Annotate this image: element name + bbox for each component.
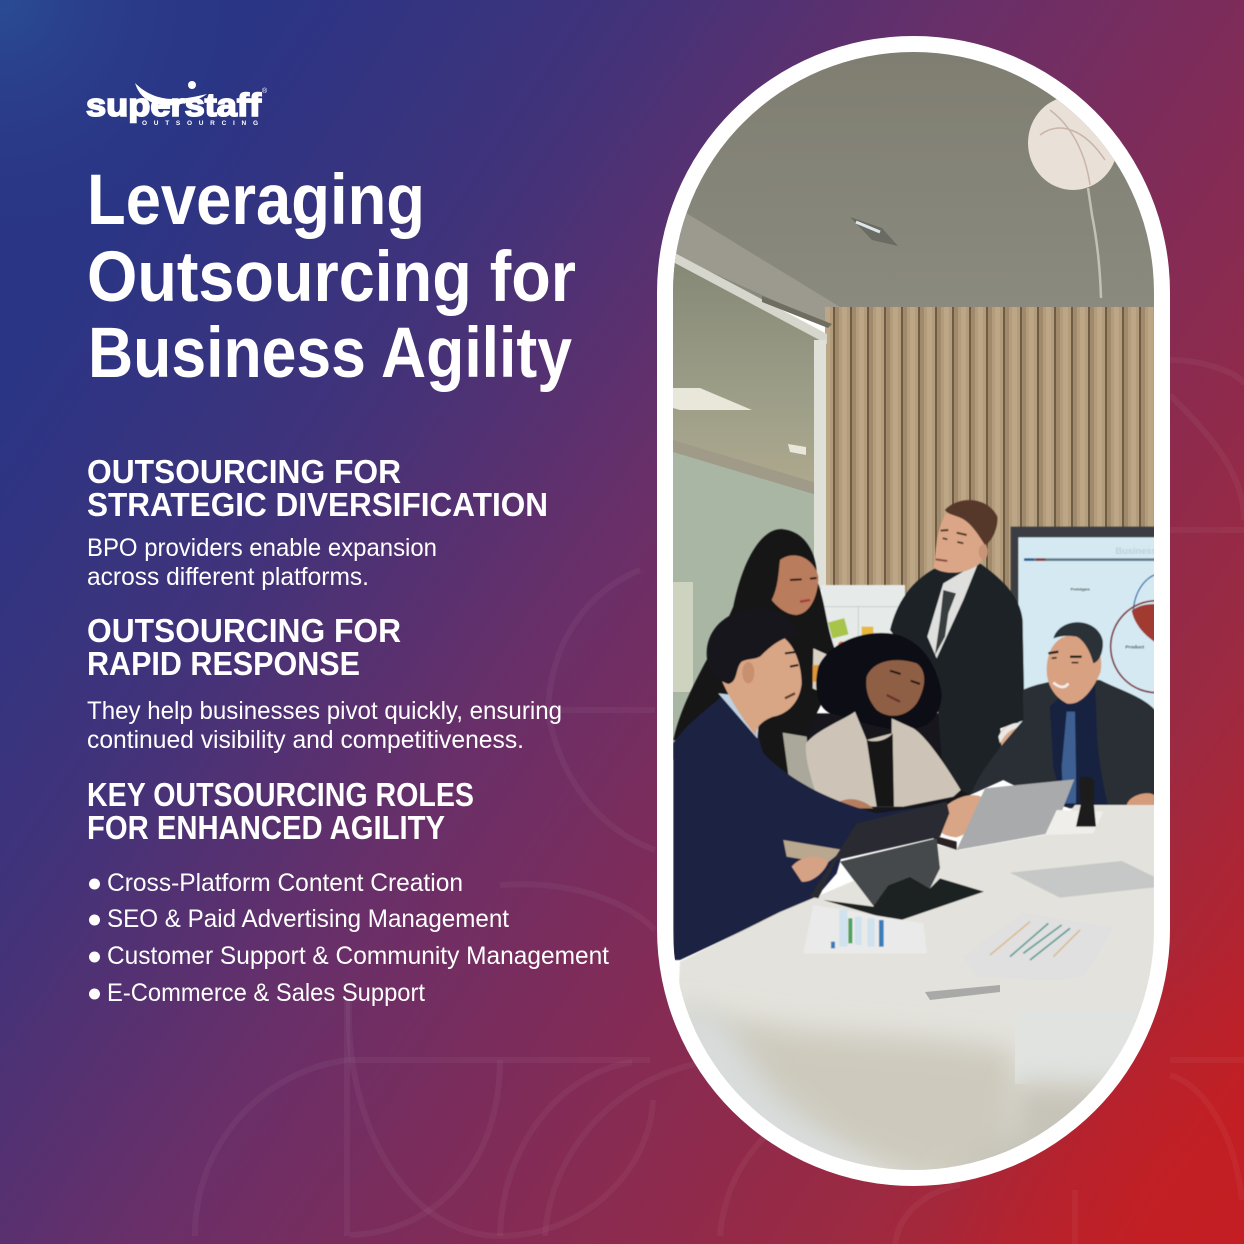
section: rapid response [87,612,562,754]
table foreground shading [686,985,1140,1170]
paper behind laptop [1045,810,1103,835]
logo registered mark: ® [262,87,268,95]
man in navy suit, seated left [673,608,987,960]
standing man in dark suit [890,500,1032,795]
room: curtain wall [825,307,1154,597]
keyboard under laptop [932,835,957,850]
body text [87,697,562,754]
photo frame: white pill border [657,36,1170,1186]
body text [87,534,437,591]
desktop camera [1076,777,1096,827]
heading: KEY OUTSOURCING ROLES [87,776,474,813]
background geometric line pattern [195,360,1244,1244]
bullet list: Cross-Platform Content Creation [107,869,463,897]
table surface [670,805,1155,1180]
room: ceiling vent [850,217,898,246]
room: ceiling lamp [1028,96,1118,298]
section: strategic diversification [87,453,548,591]
presentation screen: Product [1125,645,1144,651]
heading: RAPID RESPONSE [87,645,360,682]
presentation screen [1010,526,1154,724]
bullet list [89,869,609,1007]
body text: BPO providers enable expansion [87,534,437,562]
dark backdrop between the people [760,713,970,857]
section: key outsourcing roles [87,776,609,1007]
bullet list: Customer Support & Community Management [107,942,609,970]
body text: They help businesses pivot quickly, ensuring [87,697,562,725]
title: Business Agility [88,314,572,393]
seated man on the right [970,622,1155,814]
printed chart: bars [803,905,927,953]
heading [87,776,474,846]
tablet on stand [810,802,984,922]
title: Outsourcing for [87,238,576,317]
body text: continued visibility and competitiveness. [87,726,524,754]
presentation screen: Prototypes [1071,587,1090,591]
room: ceiling [673,52,1154,308]
title: Leveraging [87,161,425,240]
room: left wall soffit [676,214,840,322]
heading: OUTSOURCING FOR [87,612,401,649]
logo tagline: OUTSOURCING [142,120,258,127]
bullet list: SEO & Paid Advertising Management [107,905,509,933]
heading [87,612,401,682]
photo detail in zoomed coordinates [673,499,1154,1170]
laptop [957,779,1074,850]
heading: FOR ENHANCED AGILITY [87,809,445,846]
bullet list: E-Commerce & Sales Support [107,979,425,1007]
photo: business team meeting around a table [673,52,1154,1170]
chair behind the seated woman [782,732,815,791]
logo wordmark: superstaff [86,87,261,123]
presentation screen: Business [1115,546,1157,556]
woman with long black hair [673,528,835,753]
document on table right [1010,861,1154,898]
heading: OUTSOURCING FOR [87,453,401,490]
seated woman in beige blazer [806,633,961,808]
whiteboard [820,584,906,648]
heading: STRATEGIC DIVERSIFICATION [87,486,548,523]
printed chart: lines [990,921,1080,961]
title [87,161,576,393]
logo dot [188,81,196,89]
logo: SuperStaff Outsourcing [86,81,268,127]
logo swoosh [135,83,207,105]
room: window panels [673,252,832,760]
body text: across different platforms. [87,563,369,591]
heading [87,453,548,523]
